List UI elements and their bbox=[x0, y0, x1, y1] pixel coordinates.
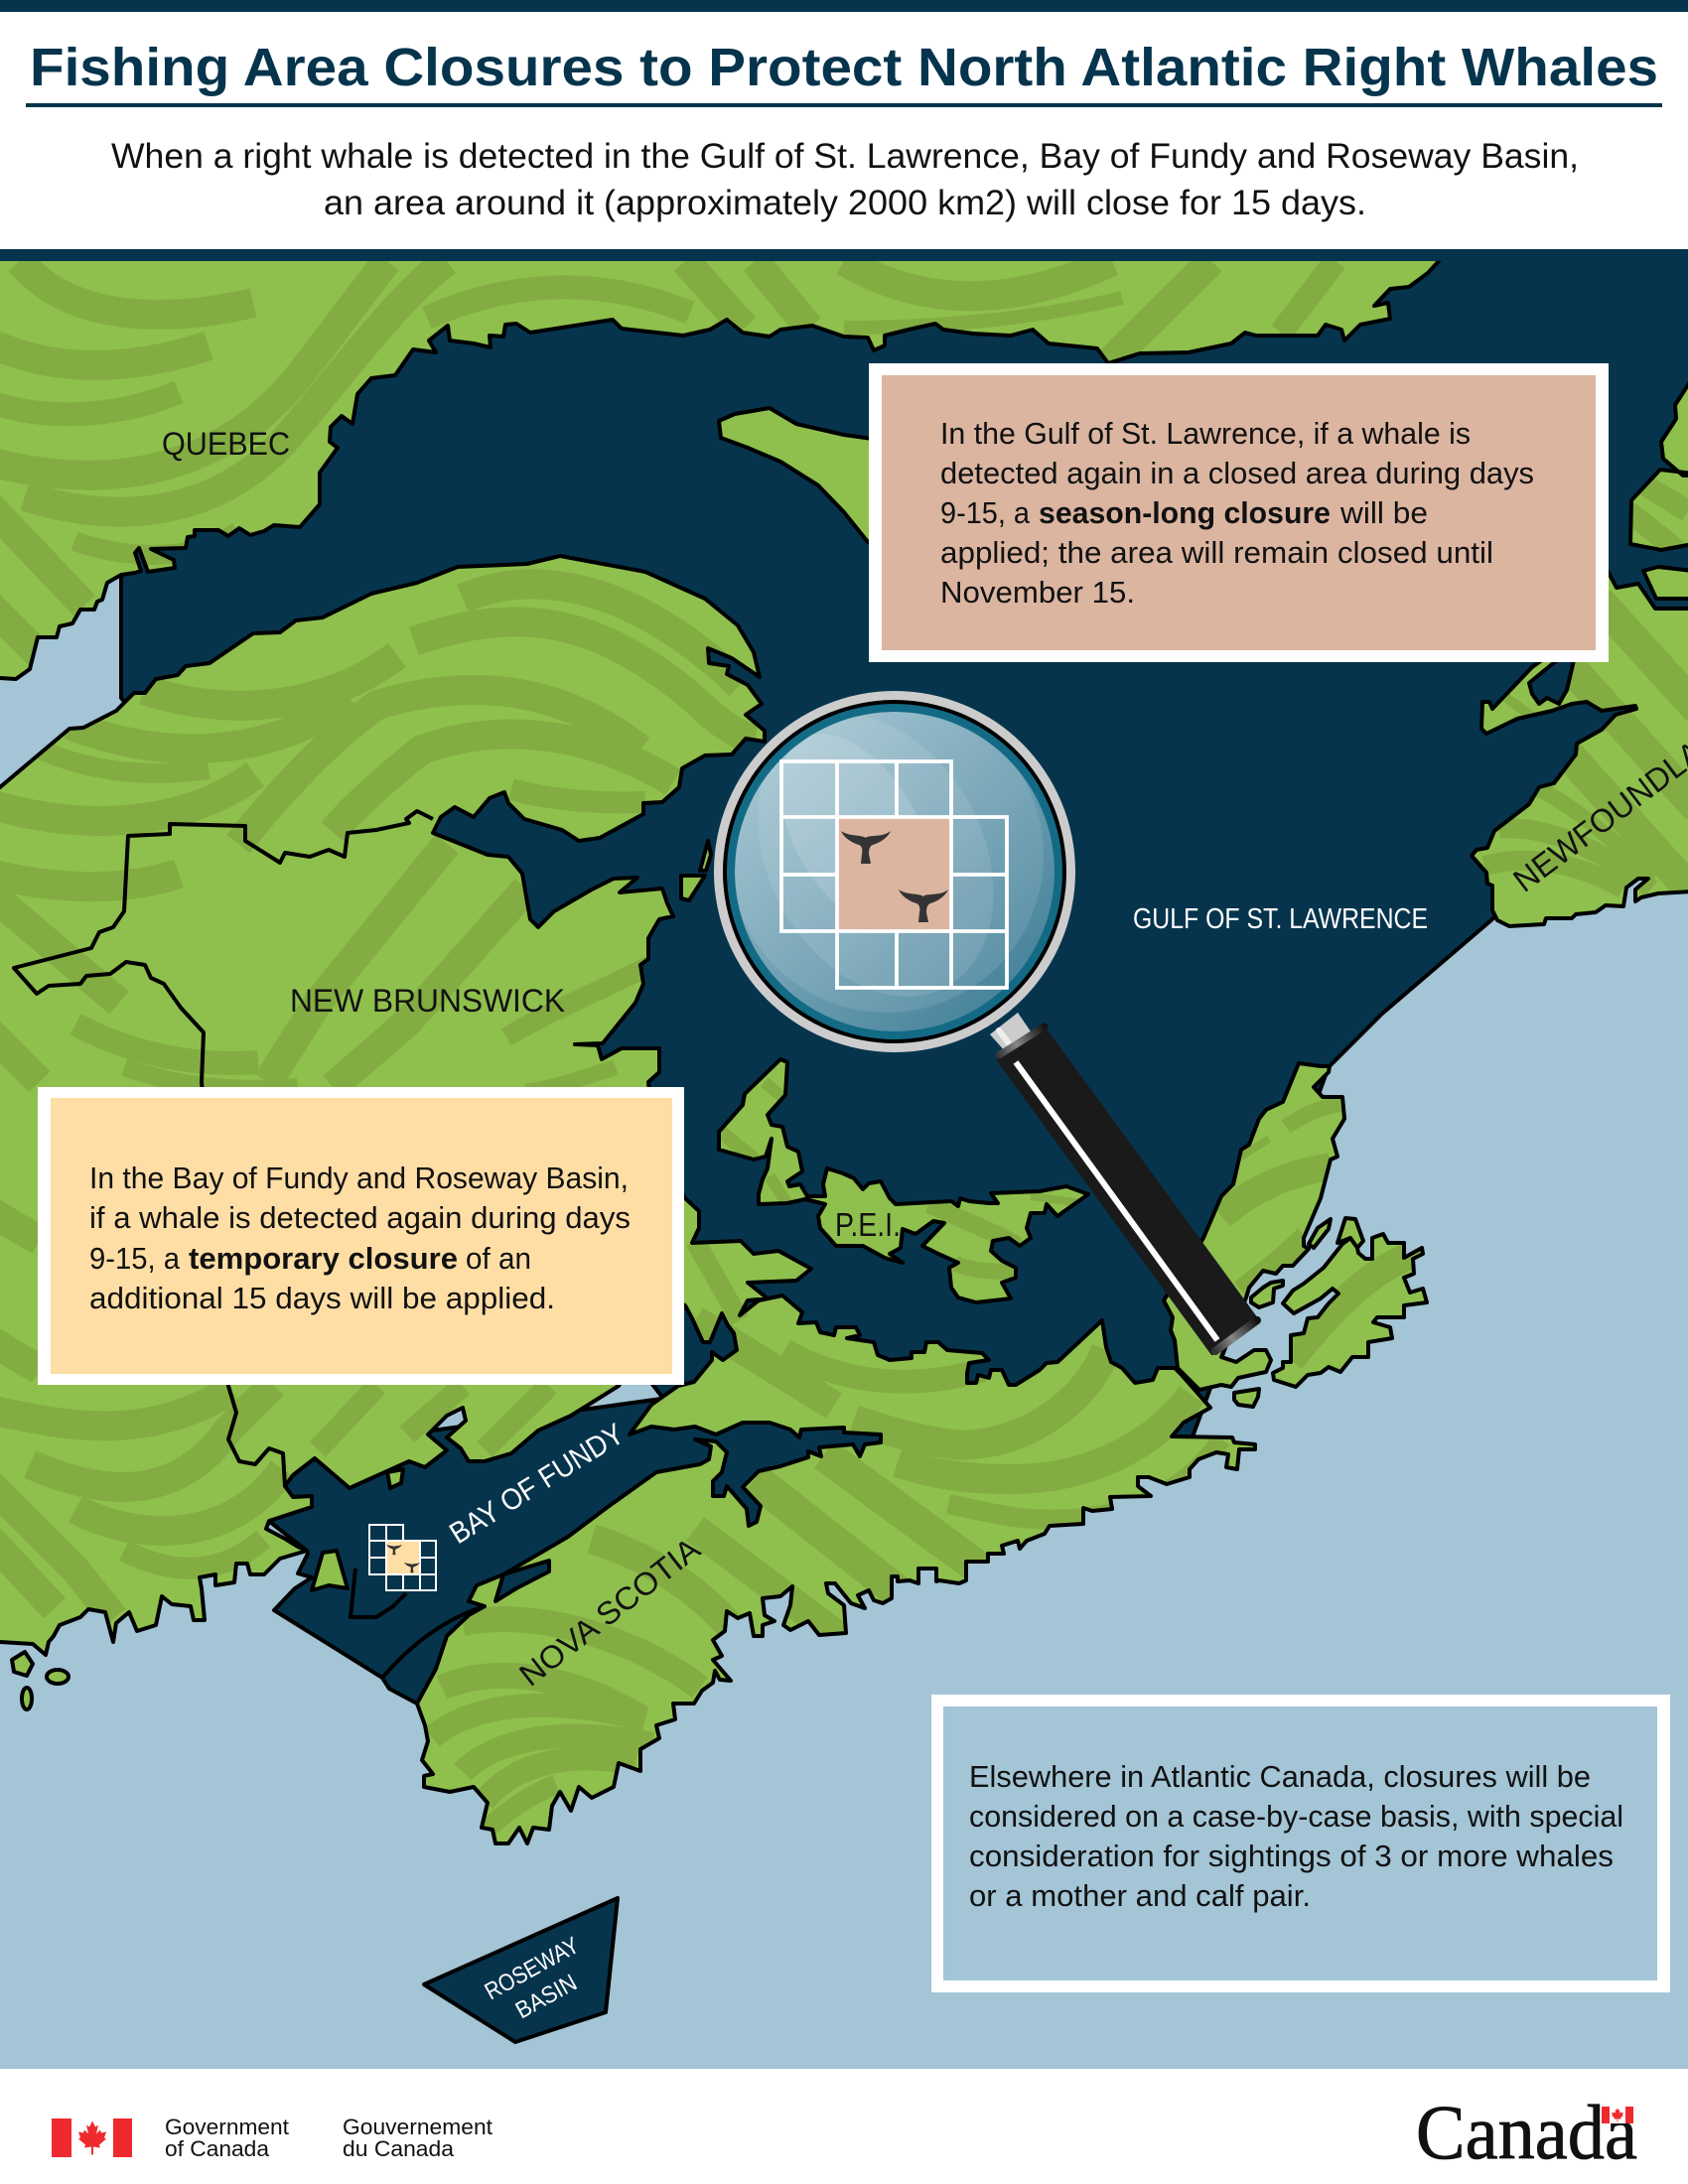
callout: Gulf of St. Lawrence: 9-15, a bbox=[940, 495, 1031, 530]
label: P.E.I.: P.E.I. bbox=[835, 1206, 901, 1243]
water: Bay of Fundy bbox=[266, 1386, 894, 1704]
handle grip bbox=[999, 1029, 1257, 1353]
handle end cap top bbox=[999, 1026, 1045, 1055]
handle glint bbox=[999, 1030, 1009, 1043]
magnifying glass bbox=[711, 674, 1257, 1353]
callout: Bay of Fundy and Roseway Basin bbox=[38, 1087, 684, 1385]
callout: Gulf of St. Lawrence: season-long closure bbox=[1039, 495, 1331, 530]
subtitle: When a right whale is detected in the Gulf of St. Lawrence, Bay of Fundy and Roseway Basin, bbox=[111, 137, 1579, 176]
callout: Gulf of St. Lawrence: applied; the area will remain closed until bbox=[940, 535, 1493, 570]
closure zone outline in Bay of Fundy bbox=[351, 1569, 406, 1617]
lens glass bbox=[735, 712, 1055, 1031]
land outlines bbox=[0, 253, 1688, 1843]
icon: whale tail bbox=[899, 889, 948, 922]
lens rim bbox=[714, 691, 1075, 1052]
government wordmark: du Canada bbox=[343, 2136, 455, 2161]
callout: elsewhere in Atlantic Canada: considered on a case-by-case basis, with special bbox=[969, 1799, 1623, 1834]
subtitle bbox=[111, 137, 1579, 222]
icon: Government of Canada flag bbox=[52, 2118, 132, 2157]
top bar bbox=[0, 0, 1688, 12]
land fills bbox=[0, 253, 1688, 1843]
callout: Gulf of St. Lawrence: In the Gulf of St. Lawrence, if a whale is bbox=[940, 416, 1471, 451]
land: Quebec north shore bbox=[0, 253, 1445, 679]
callout: Bay of Fundy and Roseway Basin: 9-15, a bbox=[89, 1241, 181, 1276]
handle end cap bottom bbox=[1215, 1320, 1257, 1351]
small closure grid in Bay of Fundy bbox=[369, 1525, 436, 1590]
land: Newfoundland bbox=[1472, 377, 1688, 926]
government wordmark bbox=[165, 2115, 492, 2161]
title: Fishing Area Closures to Protect North Atlantic Right Whales bbox=[30, 38, 1658, 97]
label: New Brunswick: NEW BRUNSWICK bbox=[290, 983, 565, 1019]
government wordmark: of Canada bbox=[165, 2136, 270, 2161]
inlet: Newfoundland bay bbox=[1529, 660, 1574, 704]
Canada wordmark: Canada bbox=[1416, 2089, 1637, 2175]
land: Gaspe, New Brunswick, Maine and Nova Scotia bbox=[0, 556, 1255, 1843]
label: Quebec: QUEBEC bbox=[162, 426, 290, 462]
icon: whale tail bbox=[841, 831, 891, 864]
region labels bbox=[162, 426, 1688, 1694]
callout: Gulf of St. Lawrence: November 15. bbox=[940, 575, 1135, 610]
band above map bbox=[0, 249, 1688, 261]
callout: Gulf of St. Lawrence bbox=[869, 363, 1609, 662]
callout: Bay of Fundy and Roseway Basin: In the Bay of Fundy and Roseway Basin, bbox=[89, 1160, 629, 1195]
roseway basin: ROSEWAY bbox=[481, 1932, 584, 2005]
handle white stripe bbox=[1016, 1062, 1217, 1340]
land: Prince Edward Island bbox=[719, 1059, 1088, 1302]
callout: Bay of Fundy and Roseway Basin: of an bbox=[466, 1241, 531, 1276]
callout: elsewhere in Atlantic Canada: Elsewhere in Atlantic Canada, closures will be bbox=[969, 1759, 1591, 1794]
callout: elsewhere in Atlantic Canada: or a mother and calf pair. bbox=[969, 1878, 1311, 1913]
government wordmark: Gouvernement bbox=[343, 2115, 492, 2139]
water: Gulf of St. Lawrence bbox=[121, 253, 1688, 1439]
callout: Gulf of St. Lawrence: detected again in a closed area during days bbox=[940, 456, 1534, 490]
callout: Bay of Fundy and Roseway Basin: temporary closure bbox=[189, 1241, 458, 1276]
provincial border line bbox=[14, 811, 433, 1486]
label: Bay of Fundy: BAY OF FUNDY bbox=[444, 1418, 630, 1551]
inlet: Annapolis Basin bbox=[495, 1561, 549, 1601]
land: Cape Breton bbox=[1164, 1063, 1427, 1407]
land: small islands bbox=[12, 841, 711, 1709]
subtitle: an area around it (approximately 2000 km2) will close for 15 days. bbox=[324, 184, 1366, 222]
land swirl texture bbox=[0, 261, 1688, 1829]
callout: Bay of Fundy and Roseway Basin: if a whale is detected again during days bbox=[89, 1200, 631, 1235]
land: Anticosti bbox=[719, 408, 894, 542]
roseway basin: BASIN bbox=[511, 1970, 582, 2024]
label: Gulf of St. Lawrence: GULF OF ST. LAWRENCE bbox=[1133, 903, 1428, 935]
roseway basin bbox=[424, 1898, 618, 2042]
callout: Gulf of St. Lawrence: will be bbox=[1339, 495, 1428, 530]
government wordmark: Government bbox=[165, 2115, 289, 2139]
handle neck bbox=[990, 1013, 1033, 1052]
closure grid bbox=[781, 761, 1007, 988]
Gulf of Maine boundary line bbox=[382, 1606, 485, 1678]
footer background bbox=[0, 2069, 1688, 2184]
callout: Bay of Fundy and Roseway Basin: additional 15 days will be applied. bbox=[89, 1281, 555, 1315]
callout: elsewhere in Atlantic Canada bbox=[931, 1695, 1670, 1992]
label: Nova Scotia: NOVA SCOTIA bbox=[512, 1530, 707, 1694]
callout: elsewhere in Atlantic Canada: consideration for sightings of 3 or more whales bbox=[969, 1839, 1614, 1873]
